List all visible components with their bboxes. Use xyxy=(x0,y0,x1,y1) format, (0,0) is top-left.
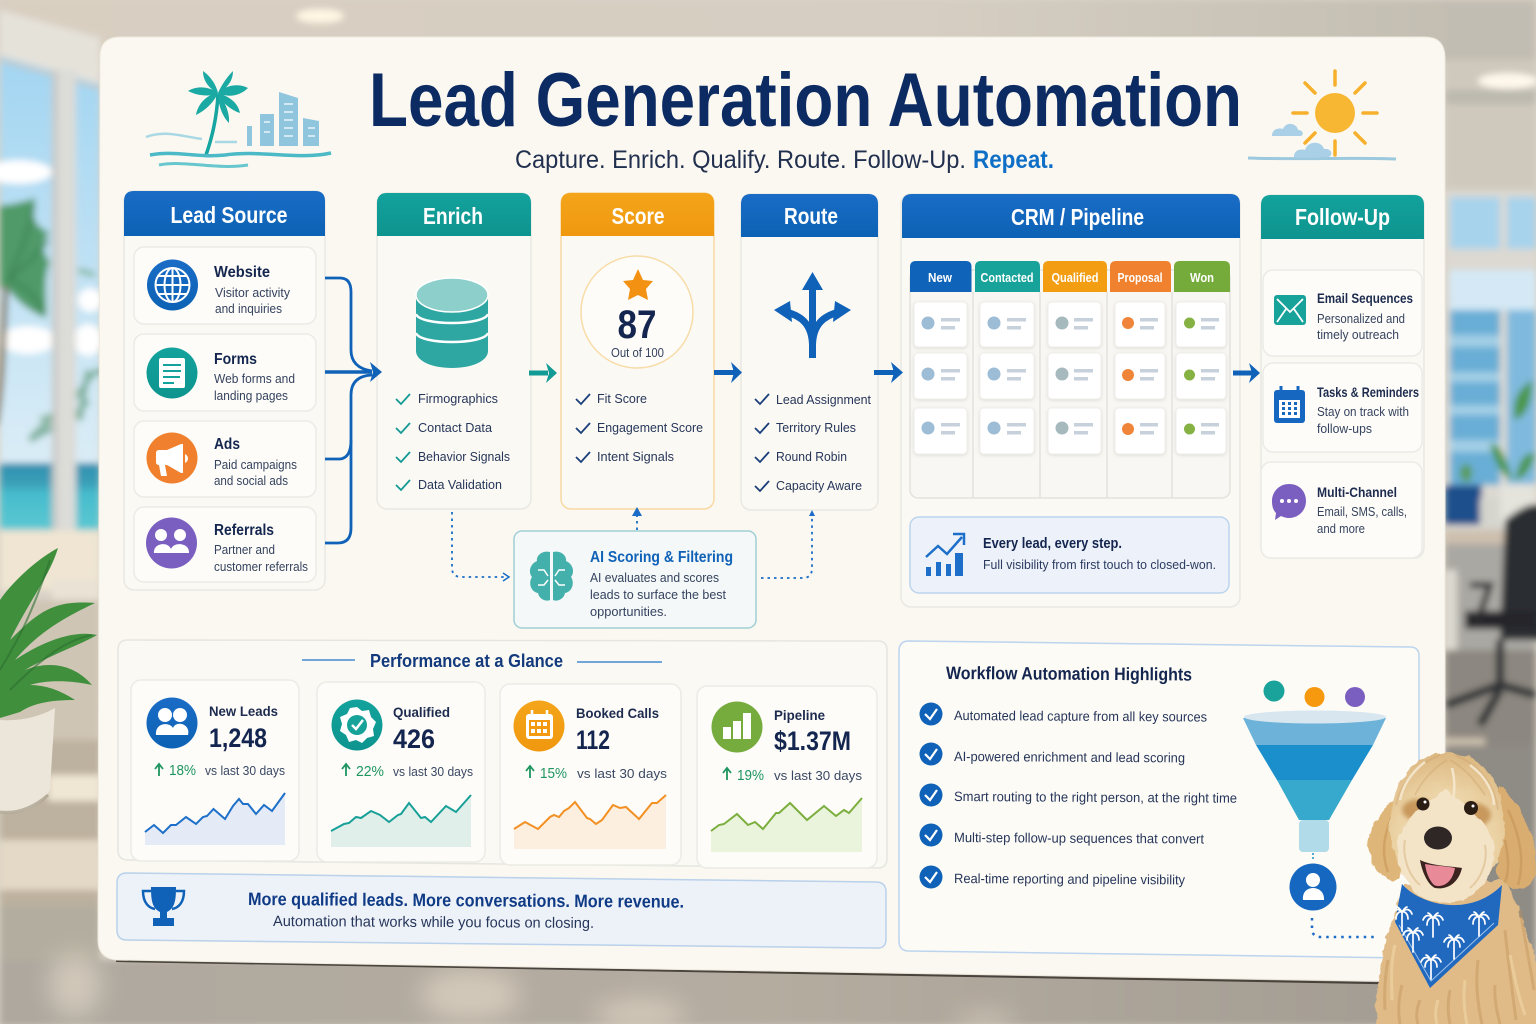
card: email sequences: Personalized and xyxy=(1317,312,1405,326)
stat card: qualified: Qualified xyxy=(393,704,450,720)
route checklist: Capacity Aware xyxy=(776,478,862,493)
stat card: booked calls: 112 xyxy=(576,725,610,755)
panel: workflow automation highlights: Workflow Automation Highlights xyxy=(946,663,1192,685)
stat card: pipeline: 19% xyxy=(737,767,764,784)
score header xyxy=(561,193,714,236)
sparkline: booked calls xyxy=(514,795,666,849)
card: ads: Paid campaigns xyxy=(214,458,297,472)
highlights checklist: AI-powered enrichment and lead scoring xyxy=(954,749,1185,765)
card: website: Visitor activity xyxy=(215,286,291,300)
enrich checklist: Contact Data xyxy=(418,420,493,435)
arrow: lead sources into enrich xyxy=(325,278,382,543)
stat card: qualified: 426 xyxy=(393,724,435,754)
panel: route xyxy=(741,194,878,510)
crm header: CRM / Pipeline xyxy=(1011,204,1144,230)
title: Lead Generation Automation xyxy=(369,58,1242,143)
dog eyes xyxy=(1416,798,1478,815)
highlights checklist: Smart routing to the right person, at the right time xyxy=(954,789,1237,806)
card: forms xyxy=(134,334,316,411)
callout: ai scoring and filtering: AI Scoring & Filtering xyxy=(590,549,733,566)
stat card: qualified: vs last 30 days xyxy=(393,764,473,779)
stat card: booked calls: 15% xyxy=(540,765,567,782)
callout: every lead xyxy=(910,517,1229,593)
route checklist: Territory Rules xyxy=(776,420,856,435)
card: referrals: Referrals xyxy=(214,522,274,539)
dotted arrows: ai scoring links xyxy=(452,507,815,581)
dog body xyxy=(1376,880,1536,1024)
card: email sequences xyxy=(1263,270,1422,356)
stat card: pipeline: Pipeline xyxy=(774,707,825,723)
panel: workflow automation highlights xyxy=(899,641,1419,958)
panel: follow-up xyxy=(1261,195,1424,558)
highlights checklist xyxy=(920,702,1237,888)
banner: more qualified leads: More qualified leads. More conversations. More revenue. xyxy=(248,889,684,912)
enrich checklist xyxy=(396,391,510,492)
card: tasks and reminders: Tasks & Reminders xyxy=(1317,384,1419,400)
enrich checklist: Firmographics xyxy=(418,391,498,406)
icon: brain xyxy=(530,552,573,601)
arrow: route to crm xyxy=(874,362,903,383)
kanban cards xyxy=(914,302,1226,454)
icon: bars xyxy=(712,702,762,752)
score checklist xyxy=(576,391,703,464)
callout: ai scoring and filtering: opportunities. xyxy=(590,605,667,619)
dog eye shading xyxy=(1402,799,1491,827)
kanban column headers: Proposal xyxy=(1118,270,1162,285)
panel: lead source xyxy=(124,191,325,590)
highlights checklist: Automated lead capture from all key sources xyxy=(954,708,1207,725)
floor light patches xyxy=(49,953,1015,1024)
dotted connector to dog xyxy=(1312,918,1377,937)
score checklist: Engagement Score xyxy=(597,420,703,435)
route header xyxy=(741,194,878,237)
kanban card lines xyxy=(941,318,1219,434)
stat card: pipeline: vs last 30 days xyxy=(774,768,862,783)
subtitle: Repeat. xyxy=(973,146,1054,174)
dog mouth and tongue xyxy=(1420,860,1462,888)
score gauge: Out of 100 xyxy=(611,346,664,360)
card: tasks and reminders xyxy=(1263,363,1422,452)
illustration: dog with bandana xyxy=(1367,752,1536,1024)
panel: enrich xyxy=(377,193,531,509)
highlights checklist: Real-time reporting and pipeline visibility xyxy=(954,871,1185,887)
route checklist: Round Robin xyxy=(776,449,847,464)
card: multi-channel: Multi-Channel xyxy=(1317,484,1397,500)
kanban card dots xyxy=(922,316,1195,435)
stat card: new leads: 1,248 xyxy=(209,723,267,753)
subtitle: Capture. Enrich. Qualify. Route. Follow-Up. xyxy=(515,146,966,174)
enrich checklist: Data Validation xyxy=(418,477,502,492)
dog muzzle xyxy=(1397,790,1494,903)
panel: score xyxy=(561,193,714,509)
kanban column headers: Won xyxy=(1190,270,1214,285)
stat card: pipeline xyxy=(697,686,877,868)
follow-up header xyxy=(1261,195,1424,239)
card: tasks and reminders: follow-ups xyxy=(1317,422,1372,436)
score gauge xyxy=(581,256,693,368)
route checklist: Lead Assignment xyxy=(776,392,871,407)
card: email sequences: timely outreach xyxy=(1317,328,1399,342)
icon: badge xyxy=(332,700,382,750)
card: website xyxy=(134,247,316,324)
card: tasks and reminders: Stay on track with xyxy=(1317,405,1409,419)
dog bandana xyxy=(1392,884,1502,988)
stat card: new leads: 18% xyxy=(169,762,196,779)
enrich checklist: Behavior Signals xyxy=(418,449,510,464)
card: email sequences: Email Sequences xyxy=(1317,290,1413,306)
banner: more qualified leads xyxy=(117,873,886,948)
card: referrals: customer referrals xyxy=(214,560,308,574)
score checklist: Fit Score xyxy=(597,391,647,406)
kanban column headers: Contacted xyxy=(980,270,1034,285)
panel: crm pipeline xyxy=(901,194,1240,607)
arrow: score to route xyxy=(714,362,742,383)
icon: sun and clouds xyxy=(1248,71,1396,159)
route checklist xyxy=(755,392,871,493)
sparkline: pipeline xyxy=(711,798,862,852)
performance heading: Performance at a Glance xyxy=(370,651,563,671)
route header: Route xyxy=(784,203,838,229)
enrich header: Enrich xyxy=(423,203,483,229)
card: referrals xyxy=(134,507,316,582)
dog nose xyxy=(1424,826,1452,850)
kanban board xyxy=(910,261,1230,498)
card: website: and inquiries xyxy=(215,302,282,316)
stat card: new leads xyxy=(131,680,299,861)
panel: performance at a glance xyxy=(118,640,887,868)
score header: Score xyxy=(612,203,664,229)
card: multi-channel: Email, SMS, calls, xyxy=(1317,505,1407,519)
stat card: booked calls xyxy=(500,684,681,865)
stat card: booked calls: Booked Calls xyxy=(576,705,659,721)
arrow: crm to follow-up xyxy=(1233,363,1260,383)
callout: ai scoring and filtering: AI evaluates and scores xyxy=(590,571,719,585)
card: forms: landing pages xyxy=(214,389,288,403)
stat card: booked calls: vs last 30 days xyxy=(577,766,668,781)
card: multi-channel xyxy=(1261,462,1422,558)
score checklist: Intent Signals xyxy=(597,449,674,464)
potted plant xyxy=(0,548,97,813)
lead source header xyxy=(124,191,325,236)
dog ears xyxy=(1367,785,1536,889)
icon: routing arrows xyxy=(774,272,851,358)
icon: people xyxy=(146,698,198,748)
callout: every lead: Full visibility from first touch to closed-won. xyxy=(983,557,1216,572)
icon: funnel xyxy=(1243,680,1386,860)
kanban column headers: New xyxy=(928,270,953,285)
score gauge: 87 xyxy=(618,303,656,347)
card: ads: and social ads xyxy=(214,474,288,488)
dog head xyxy=(1389,752,1505,896)
sparkline: new leads xyxy=(145,793,285,845)
banner: more qualified leads: Automation that works while you focus on closing. xyxy=(273,913,594,932)
sparkline: qualified xyxy=(331,795,471,847)
card: forms: Web forms and xyxy=(214,372,295,386)
callout: ai scoring and filtering: leads to surface the best xyxy=(590,588,727,602)
icon: database xyxy=(416,278,488,368)
follow-up header: Follow-Up xyxy=(1295,204,1390,230)
kanban column headers xyxy=(910,261,1230,292)
highlights checklist: Multi-step follow-up sequences that convert xyxy=(954,830,1204,847)
enrich header xyxy=(377,193,531,236)
icon: palm and skyline logo xyxy=(146,71,331,166)
icon: calendar xyxy=(514,700,564,752)
callout: ai scoring and filtering xyxy=(514,531,756,628)
card: ads xyxy=(134,421,316,497)
stat card: new leads: New Leads xyxy=(209,703,278,719)
card: website: Website xyxy=(214,264,270,281)
lead source header: Lead Source xyxy=(170,202,288,228)
stat card: pipeline: $1.37M xyxy=(774,726,851,756)
crm header xyxy=(902,194,1240,238)
stat card: qualified xyxy=(317,682,485,862)
card: forms: Forms xyxy=(214,351,257,368)
card: ads: Ads xyxy=(214,436,240,453)
icon: lead person xyxy=(1290,864,1336,910)
kanban column headers: Qualified xyxy=(1052,270,1099,285)
icon: trophy xyxy=(143,887,184,926)
stat card: qualified: 22% xyxy=(356,763,384,780)
stat card: new leads: vs last 30 days xyxy=(205,763,285,778)
card: referrals: Partner and xyxy=(214,543,275,557)
callout: every lead: Every lead, every step. xyxy=(983,535,1122,552)
arrow: enrich to score xyxy=(529,363,557,383)
card: multi-channel: and more xyxy=(1317,522,1365,536)
